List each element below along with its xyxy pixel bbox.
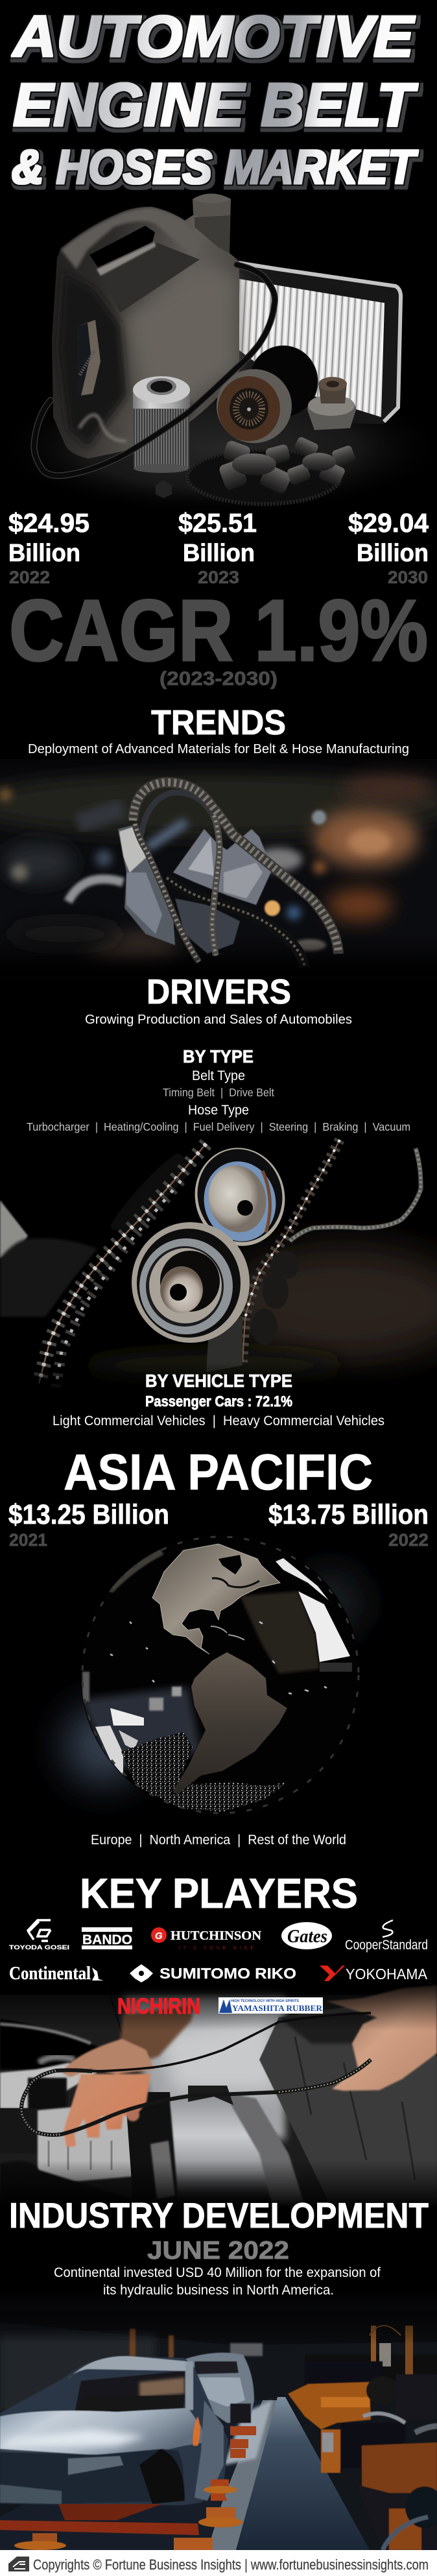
- logo: Sumitomo Riko: SUMITOMO RIKO: [159, 1965, 296, 1982]
- logo: Yamashita Rubber: YAMASHITA RUBBER: [232, 2004, 323, 2013]
- air filter: [234, 261, 402, 424]
- other vehicle types: Light Commercial Vehicles | Heavy Commercial Vehicles: [53, 1414, 384, 1428]
- logo: Yokohama: YOKOHAMA: [346, 1966, 428, 1982]
- region value 2022: [268, 1499, 429, 1550]
- timing ring gear: [187, 450, 340, 504]
- value 2023: Billion: [183, 540, 255, 567]
- south america: [173, 1652, 287, 1795]
- hudson bay: [218, 1555, 242, 1574]
- left arm and hand: [62, 2004, 195, 2147]
- belt type label: Belt Type: [192, 1068, 245, 1083]
- factory photo: car assembly line: [0, 2290, 437, 2550]
- drivers heading: DRIVERS: [147, 972, 291, 1011]
- factory top fade: [0, 2290, 437, 2345]
- logo: Toyoda Gosei: TOYODA GOSEI: [9, 1944, 69, 1951]
- engine left panel: [0, 2063, 97, 2108]
- orange robots: [288, 2361, 437, 2550]
- region value 2022: 2022: [388, 1530, 429, 1550]
- value 2023: $25.51: [178, 508, 257, 538]
- belt type list: Timing Belt | Drive Belt: [163, 1086, 274, 1099]
- logo: Bando: BANDO: [82, 1932, 132, 1947]
- orange jack stands: [0, 2479, 242, 2550]
- key players heading: KEY PLAYERS: [80, 1870, 358, 1917]
- glove: [118, 825, 272, 954]
- logo: Nichirin: NICHIRIN: [117, 1994, 200, 2019]
- logo: Gates: Gates: [287, 1927, 327, 1947]
- spark of light: [265, 900, 280, 916]
- engine bay bokeh: [0, 746, 437, 980]
- trends text: Deployment of Advanced Materials for Belt & Hose Manufacturing: [28, 741, 409, 756]
- upper pulley: [185, 1138, 295, 1255]
- logo: Continental: Continental: [9, 1964, 91, 1984]
- development text: [54, 2265, 381, 2298]
- jug left shade: [58, 272, 126, 448]
- logo: Yamashita Rubber: HIGH TECHNOLOGY WITH HIGH SPIRITS: [231, 1999, 300, 2003]
- universal joints: [156, 436, 356, 498]
- title: & HOSES MARKET: [12, 140, 418, 194]
- top fade: [0, 1979, 437, 2030]
- logo: Gates: [281, 1922, 332, 1949]
- studio floor: [0, 379, 437, 516]
- title: [12, 5, 418, 194]
- development text: Continental invested USD 40 Million for the expansion of: [54, 2265, 381, 2280]
- title: AUTOMOTIVE: [12, 5, 416, 69]
- car front structure: [0, 2449, 185, 2504]
- logo: Sumitomo Riko: [130, 1964, 296, 1982]
- oil filter: [133, 376, 190, 473]
- hose type list: Turbocharger | Heating/Cooling | Fuel Delivery | Steering | Braking | Vacuum: [27, 1120, 410, 1133]
- logo: Bando: [82, 1927, 132, 1949]
- globe sphere: [80, 1535, 360, 1815]
- engine dark gap: [125, 2092, 176, 2199]
- value 2022: [8, 508, 89, 587]
- jug inset panel: [97, 242, 200, 313]
- value 2022: $24.95: [8, 508, 89, 538]
- hero image: engine parts: [0, 193, 437, 516]
- lower pulley: [132, 1222, 250, 1343]
- bottom fade: [0, 2160, 437, 2209]
- side hole: [78, 320, 100, 396]
- timing belt: [133, 782, 338, 968]
- engine cover: [170, 2092, 289, 2199]
- value 2030: $29.04: [348, 508, 429, 538]
- value 2022: Billion: [8, 540, 80, 567]
- trends photo: gloved hand holding timing belt: [0, 746, 437, 981]
- company logos: [9, 1920, 428, 2019]
- logo: Toyoda Gosei: [9, 1920, 69, 1951]
- value 2030: Billion: [357, 540, 429, 567]
- drivers photo: pulleys and timing belt: [0, 952, 437, 1391]
- right glove fingers: [252, 1246, 305, 1345]
- orange stands far: [230, 2426, 256, 2458]
- ocean sparkle: [110, 1622, 327, 1694]
- oil jug: [52, 193, 239, 459]
- right timing belts: [242, 1140, 421, 1362]
- bottom left hoses: [0, 2161, 143, 2206]
- logo: Hutchinson: [151, 1927, 262, 1951]
- region value 2021: [8, 1499, 169, 1550]
- floor: [0, 2400, 278, 2550]
- logo: Hutchinson: IT'S YOUR RIDE: [179, 1946, 254, 1951]
- drivers text: Growing Production and Sales of Automobiles: [85, 1012, 352, 1027]
- hands with belt photo: [0, 1979, 437, 2209]
- car hood dark arc: [0, 2019, 112, 2069]
- backdrop light: [123, 1995, 285, 2141]
- footer logo: [8, 2557, 29, 2571]
- logo: Hutchinson: G: [155, 1931, 163, 1942]
- by vehicle type heading: BY VEHICLE TYPE: [145, 1371, 292, 1391]
- right hand: [326, 1985, 437, 2091]
- jug neck and cap: [193, 193, 231, 253]
- CAGR period: (2023-2030): [159, 668, 278, 690]
- by vehicle type segment: [53, 1371, 384, 1428]
- logo: Yamashita Rubber: [218, 1997, 323, 2014]
- second car: [178, 2353, 254, 2423]
- hex nut: [156, 480, 172, 498]
- value 2022: 2022: [9, 568, 50, 587]
- starter gear: [307, 377, 356, 430]
- by type heading: BY TYPE: [183, 1046, 254, 1066]
- engine background: [0, 1985, 437, 2206]
- jacket: [259, 2004, 437, 2206]
- region value 2021: $13.25 Billion: [8, 1499, 169, 1530]
- belt back band: [141, 793, 214, 837]
- market values: [8, 508, 429, 587]
- region value 2021: 2021: [9, 1530, 47, 1550]
- engine block: [38, 2102, 133, 2183]
- other regions: Europe | North America | Rest of the World: [91, 1833, 346, 1848]
- value 2023: [178, 508, 257, 587]
- date: JUNE 2022: [147, 2237, 289, 2265]
- globe: [65, 1535, 363, 1815]
- caribbean islands: [211, 1626, 244, 1640]
- aisle: [237, 2397, 370, 2550]
- jug handle highlight: [61, 208, 200, 269]
- region heading: ASIA PACIFIC: [64, 1443, 373, 1500]
- handle hole: [89, 226, 155, 267]
- north america: [152, 1544, 280, 1654]
- belt: [34, 265, 275, 475]
- great lakes: [212, 1578, 259, 1587]
- hose type label: Hose Type: [188, 1103, 249, 1118]
- belt: [21, 2013, 371, 2135]
- footer: [0, 2550, 437, 2576]
- by type segment: [27, 1046, 410, 1133]
- value 2023: 2023: [198, 568, 239, 587]
- value 2030: [348, 508, 429, 587]
- clutch: [217, 369, 292, 443]
- title: ENGINE BELT: [13, 71, 418, 139]
- development text: its hydraulic business in North America.: [103, 2283, 334, 2298]
- value 2030: 2030: [388, 568, 428, 587]
- car hood: [0, 2408, 206, 2455]
- jug body light: [123, 263, 237, 422]
- reflection panels: [81, 1552, 352, 1776]
- dark backdrop: [0, 1151, 437, 1382]
- toothed belt under pulley: [206, 1317, 242, 1372]
- trends heading: TRENDS: [151, 703, 286, 742]
- logo: Hutchinson: HUTCHINSON: [171, 1929, 262, 1943]
- globe rim sparkle: [82, 1537, 359, 1813]
- globe glow: [65, 1570, 363, 1784]
- main car: [0, 2356, 228, 2505]
- black clutch plate: [249, 346, 318, 417]
- logo: Cooper Standard: [345, 1920, 428, 1953]
- jug bottom highlight: [79, 415, 126, 441]
- passenger cars share: Passenger Cars : 72.1%: [145, 1393, 292, 1410]
- factory backdrop: [0, 2290, 437, 2550]
- antarctica speckle: [121, 1732, 287, 1812]
- left timing belts: [39, 952, 206, 1388]
